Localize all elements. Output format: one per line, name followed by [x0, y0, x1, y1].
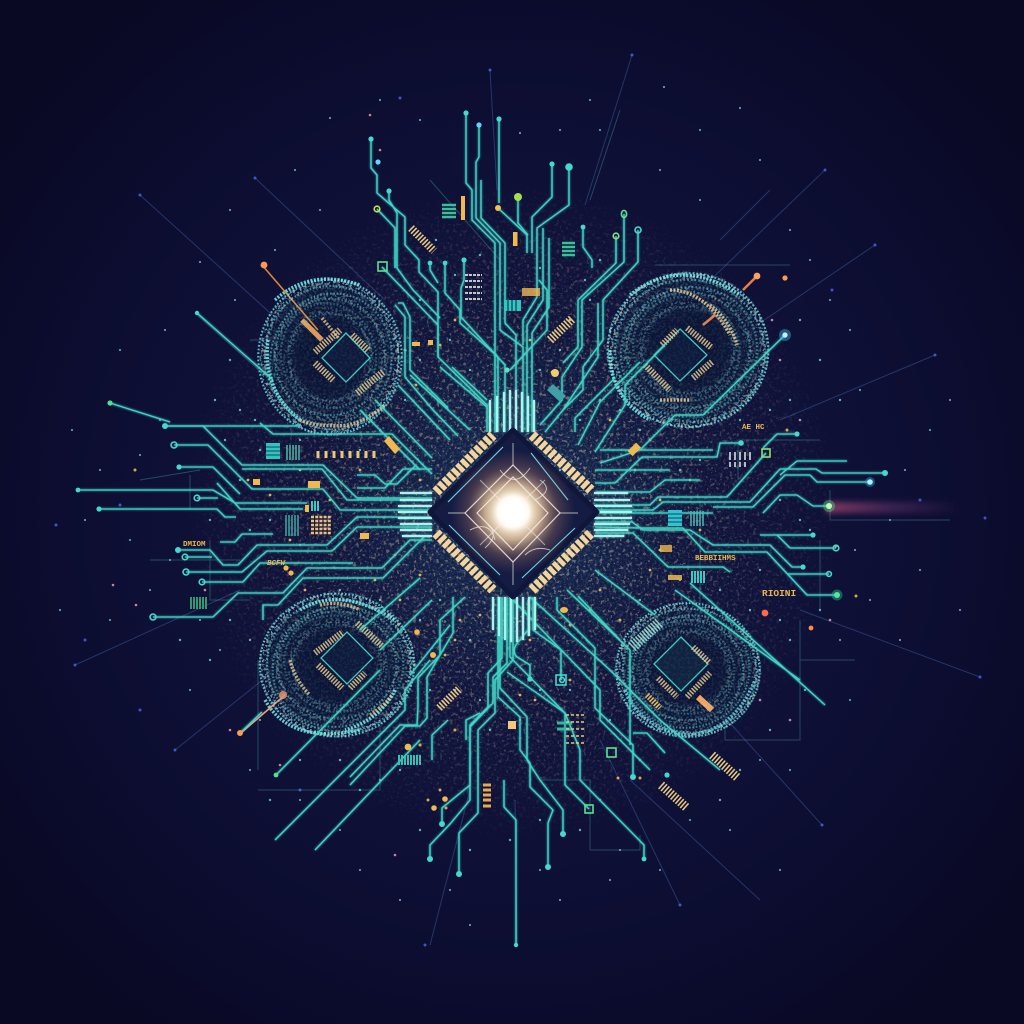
right side light streak: [826, 502, 961, 513]
small gold code labels: RIOINI: [762, 588, 796, 599]
traces: left side: [78, 403, 432, 620]
core glow: [451, 450, 575, 574]
teal stripe blocks: [191, 205, 704, 765]
small dim circuit details: [140, 110, 950, 850]
mini chip: [262, 265, 383, 393]
traces: diagonal quadrants: [197, 313, 665, 775]
orb: bottom right circuit sphere: [605, 591, 775, 750]
faint radiating rays: [75, 55, 980, 945]
central halo glow: [323, 322, 703, 702]
bright center: [498, 497, 528, 527]
gold combs and pads: [311, 228, 750, 808]
orb: top right circuit sphere: [595, 259, 785, 442]
mini chip: [242, 623, 383, 732]
scattered background particles: [56, 55, 985, 945]
traces: right side: [595, 335, 885, 595]
traces: bottom side: [275, 583, 825, 945]
chip inner lines: [448, 447, 575, 578]
orb speckle texture: [250, 260, 780, 750]
mini chip: [645, 276, 757, 390]
small gold code labels: DMIOM: [183, 541, 206, 549]
small gold code labels: BEBBIIHMS: [695, 555, 736, 563]
trace end nodes: [76, 110, 888, 947]
traces: top side: [371, 113, 638, 436]
inner diamonds and filaments: [448, 443, 578, 585]
bright signal dots: [495, 193, 875, 600]
central processor chip: [430, 430, 597, 597]
central bus lines: [398, 390, 632, 642]
small circuit components: [191, 196, 750, 811]
small gold code labels: [183, 424, 796, 599]
mini chip: [632, 622, 712, 710]
chip body: [430, 430, 597, 597]
small gold code labels: BCFW: [267, 560, 287, 568]
orb: bottom left circuit sphere: [242, 580, 430, 751]
small gold code labels: AE HC: [742, 424, 765, 432]
speckled circuit detail field: [201, 200, 824, 823]
gold pin bands: [436, 435, 591, 590]
orb: top left circuit sphere: [247, 265, 417, 450]
circuit traces: [78, 113, 885, 945]
